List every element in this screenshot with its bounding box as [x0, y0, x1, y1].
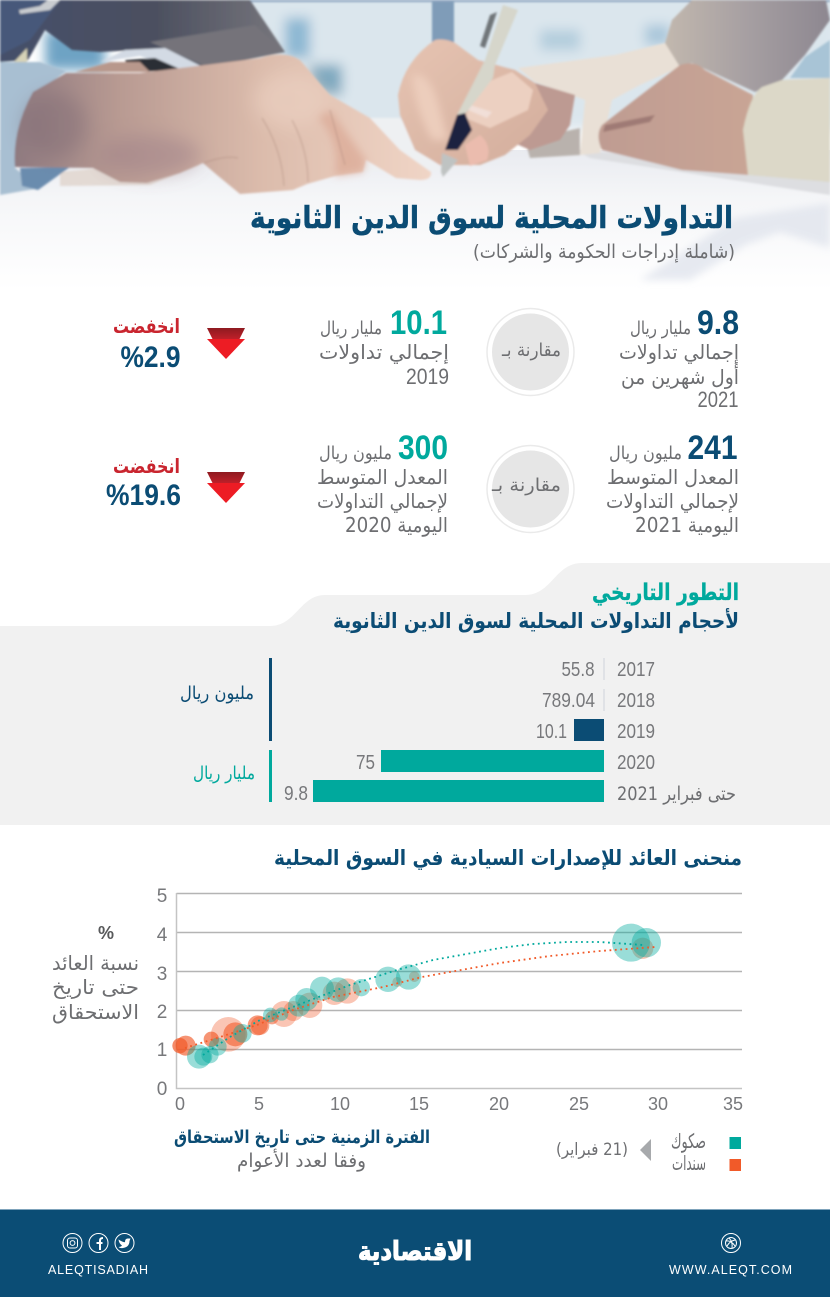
orange bubbles: bonds	[172, 938, 653, 1056]
y axis title	[52, 923, 139, 1024]
decline 19.6%	[106, 454, 181, 512]
x axis labels: 10	[330, 1094, 350, 1114]
stat: 10.1 billion riyals, 2019 total	[319, 304, 449, 389]
stat: 300 million riyals, 2020 daily average	[317, 429, 448, 537]
legend: سندات	[672, 1151, 706, 1175]
bar chart: yearly volumes: 75	[356, 752, 375, 774]
stat: 10.1 billion riyals, 2019 total: مليار ريال	[320, 318, 382, 339]
social handle: ALEQTISADIAH	[48, 1263, 148, 1277]
stat: 241 million riyals, 2021 daily average: اليومية 2021	[635, 513, 739, 537]
legend: صكوك	[671, 1129, 706, 1153]
x axis labels: 25	[569, 1094, 589, 1114]
unit bracket: billion riyals: مليار ريال	[193, 763, 255, 784]
header photo: hands signing a document	[0, 0, 830, 300]
legend: (21 فبراير)	[556, 1140, 628, 1160]
stat: 10.1 billion riyals, 2019 total: إجمالي تداولات	[319, 340, 449, 365]
stat: 9.8 billion riyals, first two months of 2021: 9.8	[697, 304, 739, 342]
social icons	[63, 1234, 134, 1252]
stat: 300 million riyals, 2020 daily average: المعدل المتوسط	[317, 465, 448, 489]
x axis labels	[175, 1094, 743, 1114]
y axis title: الاستحقاق	[52, 1000, 139, 1024]
y axis labels: 3	[157, 964, 167, 985]
bubble chart: yield curve	[157, 886, 743, 1114]
bar chart: yearly volumes: 10.1	[536, 721, 567, 743]
stat: 9.8 billion riyals, first two months of 2021: إجمالي تداولات	[619, 340, 739, 365]
bar chart: yearly volumes: 2017	[617, 659, 655, 681]
y axis title: نسبة العائد	[52, 951, 139, 975]
y axis labels: 4	[157, 925, 168, 946]
trend line: sukuk	[203, 942, 643, 1055]
trend line: bonds	[185, 947, 655, 1048]
stat: 10.1 billion riyals, 2019 total: 2019	[406, 364, 449, 389]
website url: WWW.ALEQT.COM	[669, 1263, 792, 1277]
stat: 9.8 billion riyals, first two months of 2021: أول شهرين من	[621, 364, 739, 389]
stat: 241 million riyals, 2021 daily average	[606, 429, 739, 537]
x axis labels: 5	[254, 1094, 264, 1114]
unit bracket: million riyals	[180, 658, 272, 741]
comparison row 2	[106, 429, 739, 537]
comparison badge	[487, 446, 574, 532]
heading: volumes of local trading: لأحجام التداولات المحلية لسوق الدين الثانوية	[333, 607, 739, 633]
x axis caption	[174, 1127, 430, 1172]
x axis labels: 15	[409, 1094, 429, 1114]
bar chart: yearly volumes	[284, 658, 736, 805]
icon: red down arrow	[207, 328, 245, 359]
y axis labels: 1	[157, 1040, 167, 1061]
decline 2.9%: انخفضت	[113, 314, 180, 338]
icon: website	[722, 1234, 740, 1252]
comparison badge: مقارنة بـ	[501, 340, 561, 361]
x axis labels: 35	[723, 1094, 743, 1114]
stat: 300 million riyals, 2020 daily average: 300	[398, 429, 448, 467]
decline 19.6%: %19.6	[106, 479, 181, 512]
decline 19.6%: انخفضت	[113, 454, 180, 478]
unit bracket: billion riyals	[193, 750, 272, 802]
stat: 10.1 billion riyals, 2019 total: 10.1	[390, 304, 447, 342]
stat: 300 million riyals, 2020 daily average: اليومية 2020	[345, 513, 448, 537]
legend	[556, 1129, 741, 1175]
title: التداولات المحلية لسوق الدين الثانوية	[250, 201, 733, 236]
stat: 300 million riyals, 2020 daily average: مليون ريال	[319, 443, 392, 464]
teal bubbles: sukuk	[187, 924, 661, 1069]
heading: sovereign yield curve: منحنى العائد للإصدارات السيادية في السوق المحلية	[274, 846, 742, 870]
bar chart: yearly volumes: 2019	[617, 721, 655, 743]
x axis caption: وفقا لعدد الأعوام	[237, 1149, 366, 1172]
y axis labels: 2	[157, 1002, 167, 1023]
bar chart: yearly volumes: 789.04	[542, 690, 595, 712]
unit bracket: million riyals: مليون ريال	[180, 683, 254, 704]
y axis labels: 0	[157, 1079, 167, 1100]
stat: 9.8 billion riyals, first two months of 2021: مليار ريال	[630, 318, 691, 339]
footer band	[0, 1209, 830, 1297]
bar chart: yearly volumes: 9.8	[284, 783, 308, 805]
subtitle: (شاملة إدراجات الحكومة والشركات)	[473, 241, 735, 264]
bar chart: yearly volumes: 2020	[617, 752, 655, 774]
comparison badge	[487, 308, 574, 396]
bar chart: yearly volumes: حتى فبراير 2021	[617, 783, 736, 805]
stat: 241 million riyals, 2021 daily average: مليون ريال	[609, 443, 682, 464]
decline 2.9%	[113, 314, 180, 374]
stat: 300 million riyals, 2020 daily average: لإجمالي التداولات	[317, 489, 448, 514]
decline 2.9%: %2.9	[120, 341, 180, 374]
stat: 9.8 billion riyals, first two months of 2021: 2021	[698, 387, 738, 412]
comparison badge: مقارنة بـ	[491, 475, 561, 496]
bar chart: yearly volumes: 55.8	[562, 659, 594, 681]
y axis labels	[157, 886, 168, 1100]
bar chart: yearly volumes: 2018	[617, 690, 655, 712]
stat: 241 million riyals, 2021 daily average: 241	[688, 429, 738, 467]
y axis title: %	[98, 923, 114, 943]
stat: 241 million riyals, 2021 daily average: المعدل المتوسط	[607, 465, 739, 489]
stat: 241 million riyals, 2021 daily average: لإجمالي التداولات	[606, 489, 739, 514]
y axis labels: 5	[157, 886, 167, 907]
panel: historical development	[0, 563, 830, 825]
y axis title: حتى تاريخ	[52, 975, 139, 999]
x axis labels: 30	[648, 1094, 668, 1114]
x axis labels: 20	[489, 1094, 509, 1114]
logo: الاقتصادية	[358, 1237, 472, 1267]
icon: left-pointing marker	[640, 1139, 651, 1161]
comparison row 1	[113, 304, 739, 412]
x axis labels: 0	[175, 1094, 185, 1114]
stat: 9.8 billion riyals, first two months of 2021	[619, 304, 739, 412]
icon: red down arrow	[207, 472, 245, 503]
heading: historical development: التطور التاريخي	[592, 580, 739, 606]
x axis caption: الفترة الزمنية حتى تاريخ الاستحقاق	[174, 1127, 430, 1148]
